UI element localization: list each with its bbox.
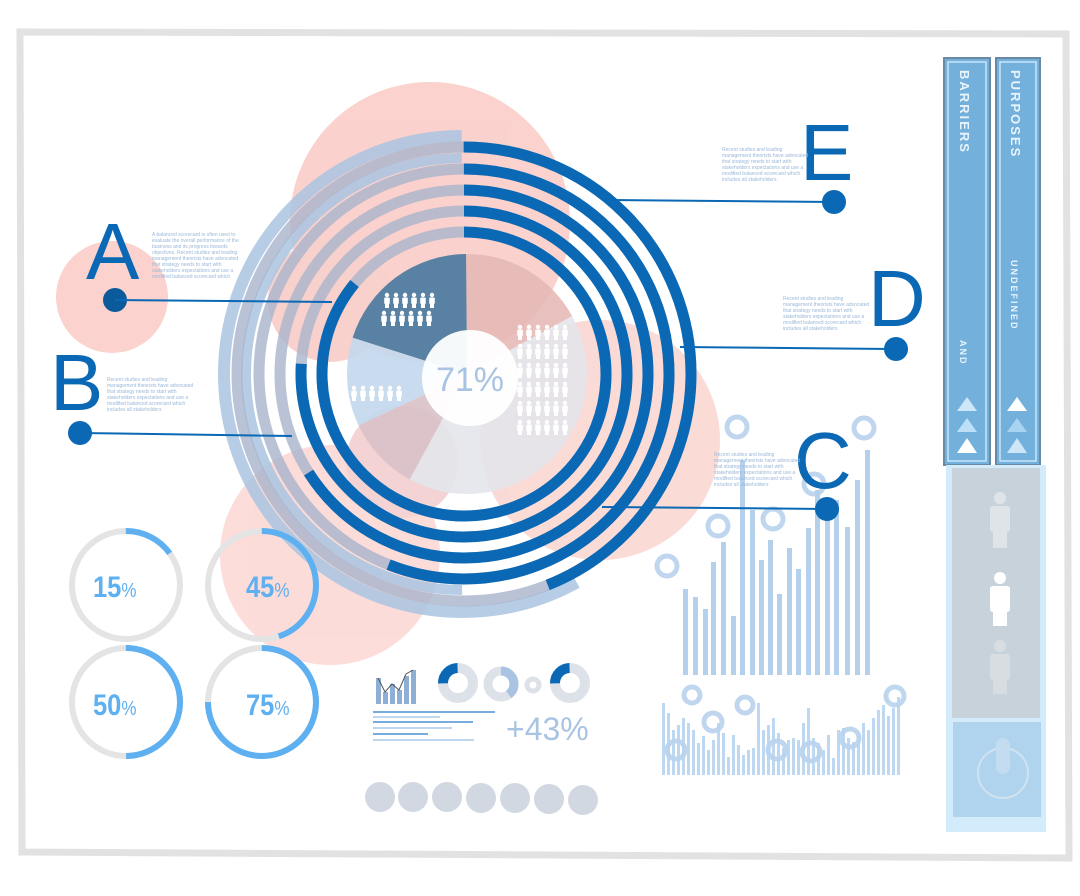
pie center label [422, 330, 518, 426]
side panel 2: PURPOSES [1008, 70, 1023, 158]
gauge 50%: 50% [93, 688, 136, 721]
callout A: A [86, 207, 140, 296]
central pie chart [407, 314, 527, 434]
callout C: stakeholders expectations and use a [714, 470, 795, 476]
callout E: that strategy needs to start with [722, 159, 792, 165]
side panel 1 [944, 58, 990, 465]
callout D: management theorists have advocated [783, 302, 869, 308]
callout D: Recent studies and leading [783, 296, 844, 302]
callout A: objectives. Recent studies and leading [152, 250, 238, 256]
callout E: management theorists have advocated [722, 153, 808, 159]
mini bar chart [376, 670, 416, 704]
callout C [602, 416, 852, 521]
people icons on pie [351, 293, 568, 435]
row of gray dots [365, 782, 598, 815]
mini text lines [373, 712, 495, 740]
gauge 50% [72, 648, 180, 756]
big stat +43%: +43% [506, 711, 589, 747]
callout D: stakeholders expectations and use a [783, 314, 864, 320]
callout B: stakeholders expectations and use a [107, 395, 188, 401]
callout E [612, 108, 853, 214]
callout D: includes all stakeholders [783, 326, 838, 332]
callout D: D [868, 254, 926, 343]
callout A: modified balanced scorecard which [152, 274, 230, 280]
side panel 2: UNDEFINED [1009, 260, 1019, 331]
callout E: includes all stakeholders [722, 177, 777, 183]
callout B: B [50, 338, 103, 427]
small donut markers [657, 417, 904, 761]
callout B: that strategy needs to start with [107, 389, 177, 395]
side panel people [946, 465, 1046, 832]
callout C: management theorists have advocated [714, 458, 800, 464]
callout B: Recent studies and leading [107, 377, 168, 383]
callout D [680, 254, 926, 361]
callout E: stakeholders expectations and use a [722, 165, 803, 171]
gauge 45%: 45% [246, 570, 289, 603]
pie center label: 71% [436, 361, 504, 399]
mini donuts [443, 668, 585, 698]
callout C: includes all stakeholders [714, 482, 769, 488]
callout D: that strategy needs to start with [783, 308, 853, 314]
side panel 1: BARRIERS [957, 70, 972, 154]
callout A: management theorists have advocated [152, 256, 238, 262]
callout B [50, 338, 292, 445]
callout A [86, 207, 332, 312]
concentric rings [224, 136, 700, 612]
gauge 15%: 15% [93, 570, 136, 603]
callout C: C [794, 416, 852, 505]
side panel 2 [996, 58, 1040, 465]
bar chart: main [683, 450, 870, 675]
gauge 15% [72, 531, 180, 639]
side panel 1: AND [958, 340, 968, 366]
gauge 45% [208, 531, 316, 639]
callout A: business and its progress towards [152, 244, 228, 250]
callout B: management theorists have advocated [107, 383, 193, 389]
callout E: modified balanced scorecard which [722, 171, 800, 177]
callout A: stakeholders expectations and use a [152, 268, 233, 274]
callout B: modified balanced scorecard which [107, 401, 185, 407]
callout A: evaluate the overall performance of the [152, 238, 239, 244]
pink background circles [56, 82, 720, 665]
callout B: includes all stakeholders [107, 407, 162, 413]
callout C: that strategy needs to start with [714, 464, 784, 470]
bar chart: lower [662, 697, 900, 775]
callout C: modified balanced scorecard which [714, 476, 792, 482]
callout E: E [800, 108, 853, 197]
callout C: Recent studies and leading [714, 452, 775, 458]
callout A: that strategy needs to start with [152, 262, 222, 268]
gauge 75% [208, 648, 316, 756]
callout E: Recent studies and leading [722, 147, 783, 153]
callout D: modified balanced scorecard which [783, 320, 861, 326]
gauge 75%: 75% [246, 688, 289, 721]
callout A: A balanced scorecard is often used to [152, 232, 236, 238]
